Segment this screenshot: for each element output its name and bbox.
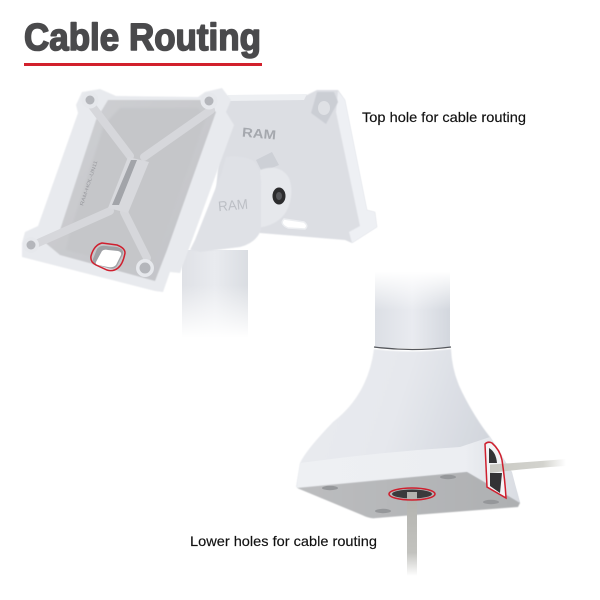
side cable	[490, 459, 566, 473]
underside	[297, 472, 520, 518]
RAM logo on arm: RAM	[217, 196, 249, 214]
side hole lower opening	[490, 473, 502, 493]
centre rib slot	[112, 160, 137, 205]
red highlight: side hole	[485, 442, 506, 498]
label: top hole: Top hole for cable routing	[362, 110, 526, 125]
knuckle arm	[190, 156, 261, 252]
recess inner floor	[66, 108, 206, 272]
red highlight: top hole	[91, 243, 125, 271]
corner screw post	[318, 101, 330, 115]
title: Cable Routing	[24, 17, 261, 59]
bottom cable	[407, 492, 417, 576]
hex screw	[272, 188, 286, 204]
front plate recess	[42, 100, 216, 281]
slot hole in back plate	[282, 219, 307, 229]
top cable hole	[93, 246, 123, 269]
illustration: tablet mount with top cable hole	[22, 88, 377, 347]
title underline	[24, 63, 262, 66]
side hole upper opening	[489, 448, 497, 463]
corner screw bosses	[23, 92, 218, 277]
centre rib block	[108, 157, 149, 213]
back plate corner recess	[311, 92, 338, 124]
underside feet	[322, 475, 499, 513]
ball joint	[256, 168, 291, 228]
front plate frame	[22, 88, 234, 292]
RAM logo on plate: RAM	[241, 125, 277, 142]
moulded part number: RAM-HOL-UN11	[79, 160, 100, 207]
lower hole	[392, 490, 432, 498]
illustration: base with lower cable holes	[296, 262, 566, 576]
bell base	[296, 349, 520, 518]
label: lower holes: Lower holes for cable routing	[190, 534, 377, 549]
side hole frame	[486, 443, 506, 498]
red highlight: bottom hole	[389, 488, 435, 500]
ribs	[38, 106, 211, 258]
pole	[178, 250, 252, 347]
back plate right edge	[336, 91, 377, 243]
column	[372, 262, 453, 348]
collar ring	[374, 347, 451, 350]
base lower band	[297, 437, 520, 503]
back plate top edge	[228, 94, 307, 101]
back plate	[215, 90, 377, 243]
clip on plate	[256, 152, 279, 172]
